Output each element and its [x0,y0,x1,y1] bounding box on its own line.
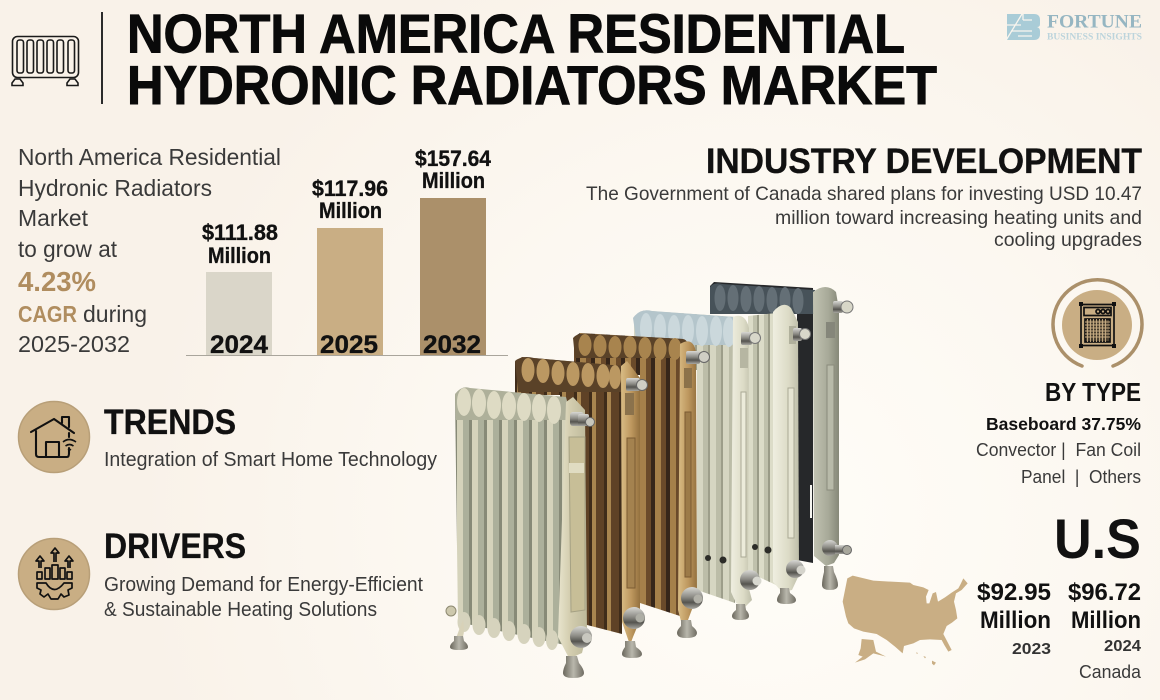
logo: Fortune Business Insights [1005,12,1142,42]
bar: 2025: 2025 [320,331,378,359]
icon: smart home [18,402,90,472]
icon: by type amplifier [1053,280,1142,366]
stat: U.S 2023 [977,579,1051,658]
text: drivers description: Growing Demand for Energy-Efficient [104,574,423,596]
text: industry development description: million toward increasing heating units and [775,207,1142,229]
text block: market growth: North America Residential [18,144,281,170]
radiator: cream, front [446,387,594,678]
bar: 2024: 2024 [210,331,268,359]
bar: 2024: Million [208,243,271,268]
stat: U.S 2024 [1068,579,1141,655]
text block: market growth: 4.23% [18,266,96,297]
text: trends description: Integration of Smart Home Technology [104,449,437,471]
heading: U.S: U.S [1054,507,1141,570]
bar chart [186,146,508,359]
text block: market growth: during [83,301,147,327]
logo: Fortune Business Insights: FORTUNE [1047,12,1142,32]
radiator: cream, fifth [748,305,810,604]
text: type segments: Baseboard 37.75% [986,414,1141,434]
text: drivers description: & Sustainable Heating Solutions [104,599,377,621]
stat: U.S 2023: 2023 [1012,641,1051,658]
text block: market growth: CAGR [18,301,77,327]
text: industry development description: cooling upgrades [994,229,1142,251]
title [127,4,937,116]
text: Canada: Canada [1079,662,1142,682]
text: type segments: Convector | Fan Coil [976,440,1141,460]
bar: 2032: Million [422,168,485,193]
icon: drivers [18,538,90,610]
icon: radiator [12,36,78,86]
bar: 2024: $111.88 [202,220,278,245]
radiator: bronze [515,357,648,658]
bar: 2024 [202,220,278,359]
bar: 2032: $157.64 [415,146,492,171]
radiator: silver [633,310,762,620]
heading: drivers: DRIVERS [104,527,246,566]
text: drivers description [104,574,423,621]
text block: market growth: Market [18,205,89,231]
text block: market growth: 2025-2032 [18,331,130,357]
title: NORTH AMERICA RESIDENTIAL [127,4,905,64]
text: type segments [976,414,1141,487]
stat: U.S 2024: Million [1071,607,1141,634]
stat: U.S 2023: Million [980,607,1051,634]
text: industry development description [586,183,1142,251]
logo: Fortune Business Insights: BUSINESS INSIGHTS [1047,32,1142,42]
title divider [101,12,103,104]
text block: market growth [18,144,281,357]
illustration: radiators [446,282,853,678]
radiator: dark grey, back [710,282,853,590]
text: industry development description: The Government of Canada shared plans for investing USD 10.47 [586,183,1142,205]
bar: 2025: Million [319,198,382,223]
map: United States [843,576,968,665]
stat: U.S 2023: $92.95 [977,579,1051,606]
text block: market growth: Hydronic Radiators [18,175,212,201]
text: type segments: Panel | Others [1021,467,1141,487]
bar: 2032: 2032 [423,331,481,359]
stat: U.S 2024: 2024 [1104,638,1141,655]
heading: by type: BY TYPE [1045,377,1141,407]
radiator: dark bronze [573,333,710,638]
bar: 2025 [312,176,388,359]
bar: 2025: $117.96 [312,176,388,201]
heading: industry development: INDUSTRY DEVELOPMENT [706,141,1142,181]
text block: market growth: to grow at [18,236,118,262]
stat: U.S 2024: $96.72 [1068,579,1141,606]
title: HYDRONIC RADIATORS MARKET [127,55,937,116]
heading: trends: TRENDS [104,403,236,442]
bar: 2032 [415,146,492,359]
